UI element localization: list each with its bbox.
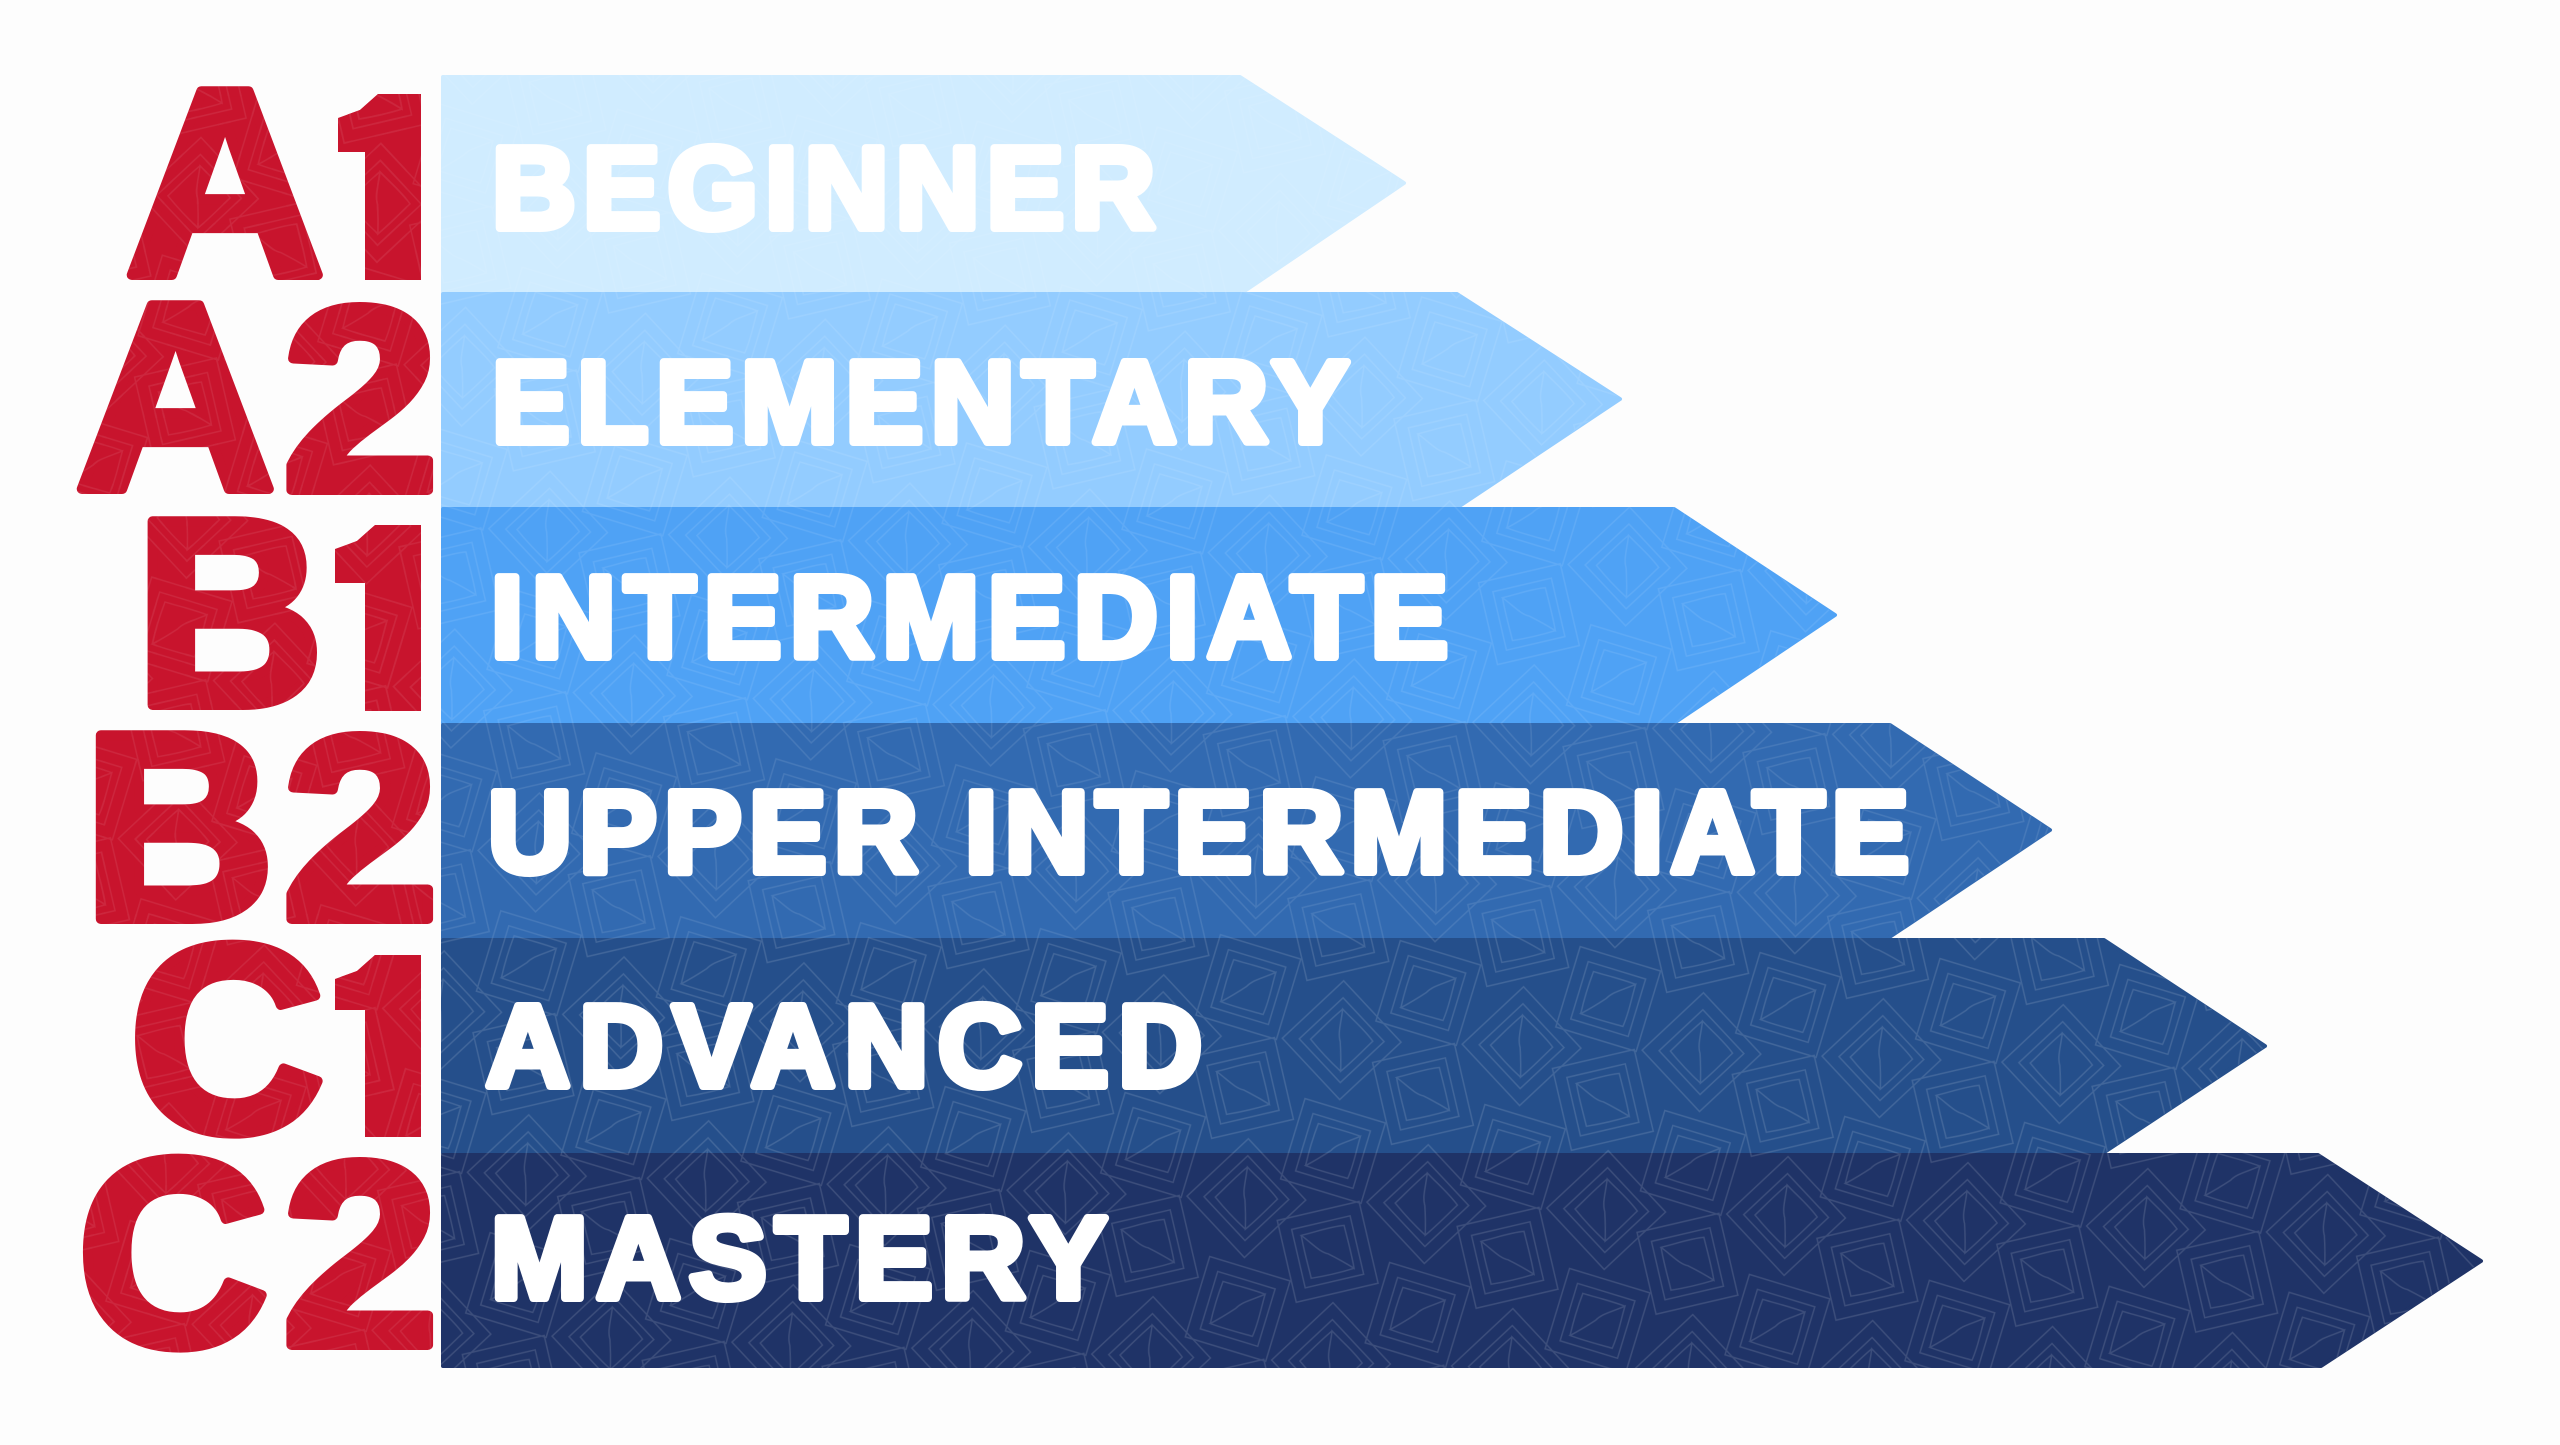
code A2: 2 [282, 253, 439, 546]
code C2: C [77, 1103, 269, 1402]
code B2: 2 [282, 682, 439, 975]
level A2 elementary arrow [441, 292, 1622, 507]
code B2 [83, 677, 439, 976]
code A1 [126, 86, 421, 280]
code C2: C [77, 1103, 269, 1402]
code C1: 1 [320, 892, 450, 1191]
code C2: 2 [282, 1108, 439, 1401]
code A1: 1 [320, 35, 450, 334]
code A2: 2 [282, 253, 439, 546]
level B2 upper intermediate arrow [441, 723, 2052, 938]
level A1 beginner arrow [441, 75, 1406, 292]
code C1 [135, 940, 421, 1139]
code A2 [75, 247, 439, 546]
label: MASTERY: MASTERY [491, 1193, 1107, 1323]
code A1: A [125, 33, 325, 332]
code B2: B [83, 677, 275, 976]
code B2: 2 [282, 682, 439, 975]
label: ADVANCED: ADVANCED [486, 981, 1202, 1111]
code A2: A [75, 247, 276, 546]
label: ELEMENTARY: ELEMENTARY [492, 337, 1349, 467]
code C2 [77, 1103, 439, 1402]
code C1: C [129, 889, 325, 1188]
code B1 [148, 516, 421, 711]
code A2: A [75, 247, 276, 546]
code B2: B [83, 677, 275, 976]
code C2: 2 [282, 1108, 439, 1401]
level B1 intermediate arrow [441, 507, 1837, 723]
code C1: C [129, 889, 325, 1188]
code B1: B [135, 463, 324, 762]
code B1: 1 [320, 466, 450, 765]
level C2 mastery arrow [441, 1153, 2483, 1368]
label: BEGINNER: BEGINNER [492, 123, 1155, 253]
code B1: 1 [320, 466, 450, 765]
code C1: 1 [320, 892, 450, 1191]
code A1: 1 [320, 35, 450, 334]
code A1: A [125, 33, 325, 332]
label: INTERMEDIATE: INTERMEDIATE [491, 552, 1448, 682]
code B1: B [135, 463, 324, 762]
level C1 advanced arrow [441, 938, 2267, 1153]
label: UPPER INTERMEDIATE: UPPER INTERMEDIATE [488, 767, 1909, 897]
